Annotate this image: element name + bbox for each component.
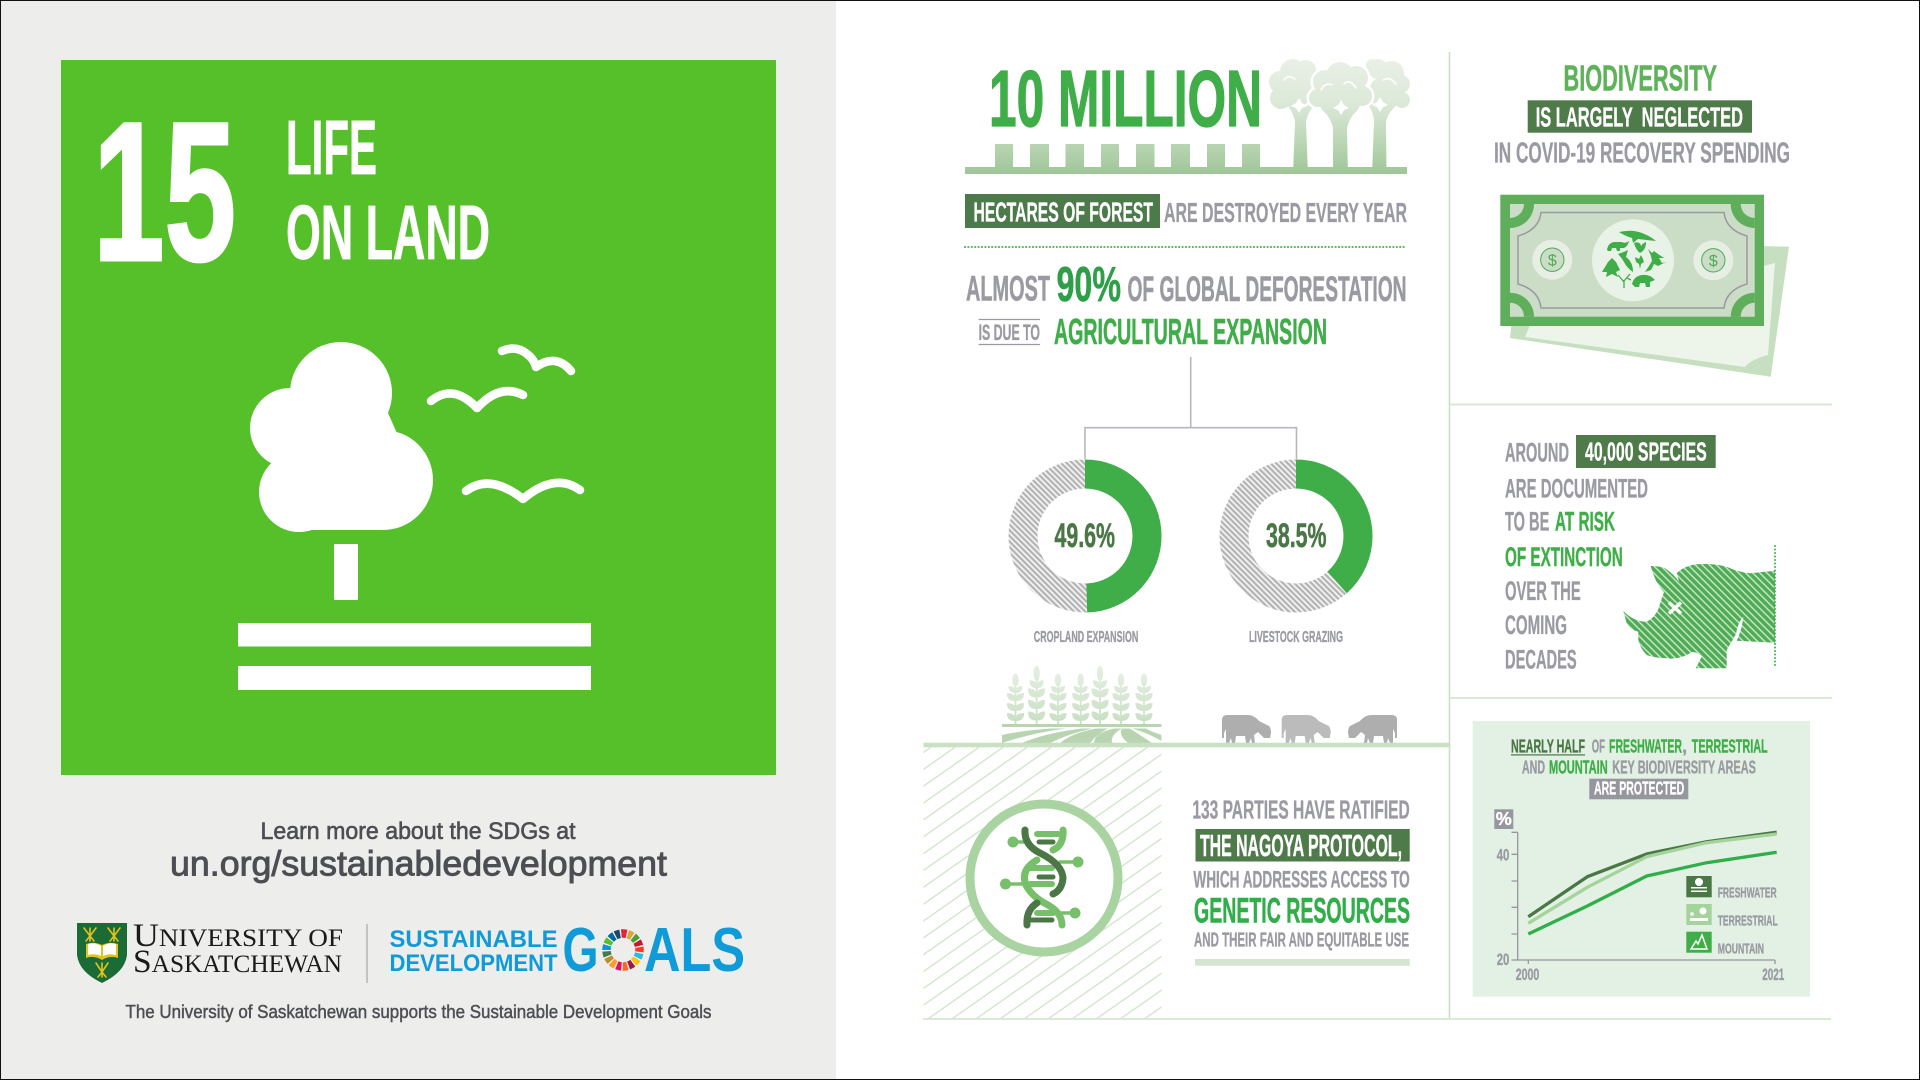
text: around: AROUND <box>1505 438 1569 468</box>
goal title: LIFE <box>286 105 377 191</box>
text: are documented to be at risk: OF EXTINCTION <box>1505 542 1623 572</box>
text: are documented to be at risk: OVER THE <box>1505 576 1581 606</box>
text: 90 percent of deforestation: 90% <box>1056 258 1121 312</box>
panel: left SDG column <box>0 0 836 1080</box>
icon: banknotes: $ <box>1709 253 1718 270</box>
goal number: 15 <box>93 81 236 302</box>
icon: animals and plants <box>1602 231 1666 288</box>
donut chart: cropland <box>1023 474 1147 598</box>
logo: University of Saskatchewan: UNIVERSITY OF <box>133 918 343 954</box>
panel: key biodiversity areas chart <box>1473 721 1810 997</box>
donut chart: cropland: 49.6% <box>1054 517 1115 555</box>
axis labels: 2000 <box>1516 966 1539 984</box>
text: nearly half: NEARLY HALF <box>1511 736 1585 757</box>
text: 90 percent of deforestation <box>966 258 1406 312</box>
text: are documented to be at risk: COMING <box>1505 610 1567 640</box>
logo: University of Saskatchewan: SASKATCHEWAN <box>133 944 342 980</box>
text: nearly half: OF <box>1592 736 1605 757</box>
icon: ground <box>238 623 591 690</box>
legend: TERRESTRIAL <box>1718 912 1778 929</box>
headline number: 10 MILLION <box>989 54 1262 143</box>
goal title: ON LAND <box>286 190 490 276</box>
highlight: largely neglected <box>1528 100 1752 133</box>
highlight: 40,000 species: 40,000 SPECIES <box>1585 437 1707 467</box>
connector arrow tree <box>1085 357 1296 459</box>
highlight: largely neglected: IS LARGELY NEGLECTED <box>1536 102 1743 133</box>
icon: tree <box>250 342 433 600</box>
heading: biodiversity: BIODIVERSITY <box>1564 58 1717 99</box>
highlight: 40,000 species <box>1576 435 1716 468</box>
text: 90 percent of deforestation: OF GLOBAL DEFORESTATION <box>1128 270 1406 309</box>
highlight: the Nagoya protocol: THE NAGOYA PROTOCOL, <box>1200 829 1402 863</box>
text: are documented to be at risk: TO BE <box>1505 507 1549 537</box>
logo: Sustainable Development Goals: G <box>562 916 598 985</box>
highlight: are protected <box>1589 779 1688 799</box>
url: un.org/sustainabledevelopment <box>170 844 667 884</box>
icon: banknotes: $ <box>1548 252 1557 270</box>
icon: DNA in circle <box>970 804 1118 952</box>
icon: three trees <box>1269 59 1410 174</box>
legend <box>1686 876 1778 957</box>
y axis unit: % <box>1496 809 1512 829</box>
axis labels: 20 <box>1497 951 1509 969</box>
logo: University of Saskatchewan <box>77 918 343 983</box>
text: genetic resources: GENETIC RESOURCES <box>1194 892 1410 931</box>
highlight: the Nagoya protocol <box>1196 829 1410 863</box>
text: are documented to be at risk: AT RISK <box>1555 507 1615 537</box>
SDG 15 tile <box>61 60 776 775</box>
hatched backdrop <box>924 747 1162 1018</box>
label: livestock grazing: LIVESTOCK GRAZING <box>1249 629 1343 646</box>
text: nearly half <box>1511 736 1768 777</box>
text: are documented to be at risk: ARE DOCUMENTED <box>1505 473 1648 503</box>
highlight: hectares of forest: HECTARES OF FOREST <box>974 197 1153 228</box>
text: nearly half: , <box>1682 736 1687 757</box>
ground line <box>924 743 1450 747</box>
axis labels <box>1497 847 1784 984</box>
icon: wheat field <box>1002 666 1161 743</box>
learn more text: Learn more about the SDGs at <box>260 818 576 845</box>
line chart <box>1494 809 1784 984</box>
text: which addresses access to: WHICH ADDRESSES ACCESS TO <box>1193 867 1410 894</box>
text: nearly half: KEY BIODIVERSITY AREAS <box>1612 756 1756 777</box>
text: agricultural expansion: AGRICULTURAL EXPANSION <box>1054 311 1327 352</box>
text: is due to: IS DUE TO <box>979 320 1040 345</box>
text: are documented to be at risk <box>1505 473 1648 675</box>
icon: cows <box>1222 715 1397 743</box>
panel: Nagoya protocol <box>924 747 1410 1018</box>
panel: species at risk <box>1505 435 1775 675</box>
logo: Sustainable Development Goals: DEVELOPMENT <box>390 950 558 977</box>
goal title <box>286 105 490 276</box>
text: nearly half: MOUNTAIN <box>1549 756 1608 777</box>
panel: deforestation headline <box>965 54 1410 352</box>
axis labels: 40 <box>1497 847 1509 865</box>
label: cropland expansion: CROPLAND EXPANSION <box>1034 629 1138 646</box>
text: nearly half: FRESHWATER <box>1609 736 1682 757</box>
icon: birds <box>431 349 580 499</box>
donut chart: livestock <box>1234 474 1358 598</box>
text: 133 parties: 133 PARTIES HAVE RATIFIED <box>1192 795 1410 825</box>
highlight: hectares of forest <box>965 194 1160 228</box>
legend: FRESHWATER <box>1718 884 1777 901</box>
logo: Sustainable Development Goals: ALS <box>644 916 745 985</box>
icon: SDG colour wheel <box>605 932 641 968</box>
icon: rhino <box>1623 546 1775 668</box>
text: nearly half: AND <box>1522 756 1545 777</box>
section dividers <box>923 52 1832 1019</box>
series lines <box>1528 832 1777 934</box>
text: is due to <box>979 320 1040 345</box>
text: fair and equitable use: AND THEIR FAIR AND EQUITABLE USE <box>1194 930 1409 952</box>
icon: tree stumps and ground <box>965 144 1407 174</box>
legend: MOUNTAIN <box>1718 940 1764 957</box>
highlight: are protected: ARE PROTECTED <box>1594 779 1684 799</box>
logo divider <box>366 924 368 983</box>
donut chart: livestock: 38.5% <box>1266 517 1326 555</box>
text: 90 percent of deforestation: ALMOST <box>966 270 1050 309</box>
icon: banknotes <box>1500 195 1789 377</box>
text: nearly half: TERRESTRIAL <box>1692 736 1768 757</box>
text: are documented to be at risk: DECADES <box>1505 645 1577 675</box>
text: destroyed every year: ARE DESTROYED EVERY YEAR <box>1164 197 1407 228</box>
support caption: The University of Saskatchewan supports the Sustainable Development Goals <box>126 1001 712 1022</box>
logo: Sustainable Development Goals <box>390 916 745 985</box>
axis labels: 2021 <box>1762 966 1784 984</box>
panel: biodiversity spending <box>1494 58 1790 377</box>
logo: Sustainable Development Goals: SUSTAINABLE <box>390 926 558 953</box>
